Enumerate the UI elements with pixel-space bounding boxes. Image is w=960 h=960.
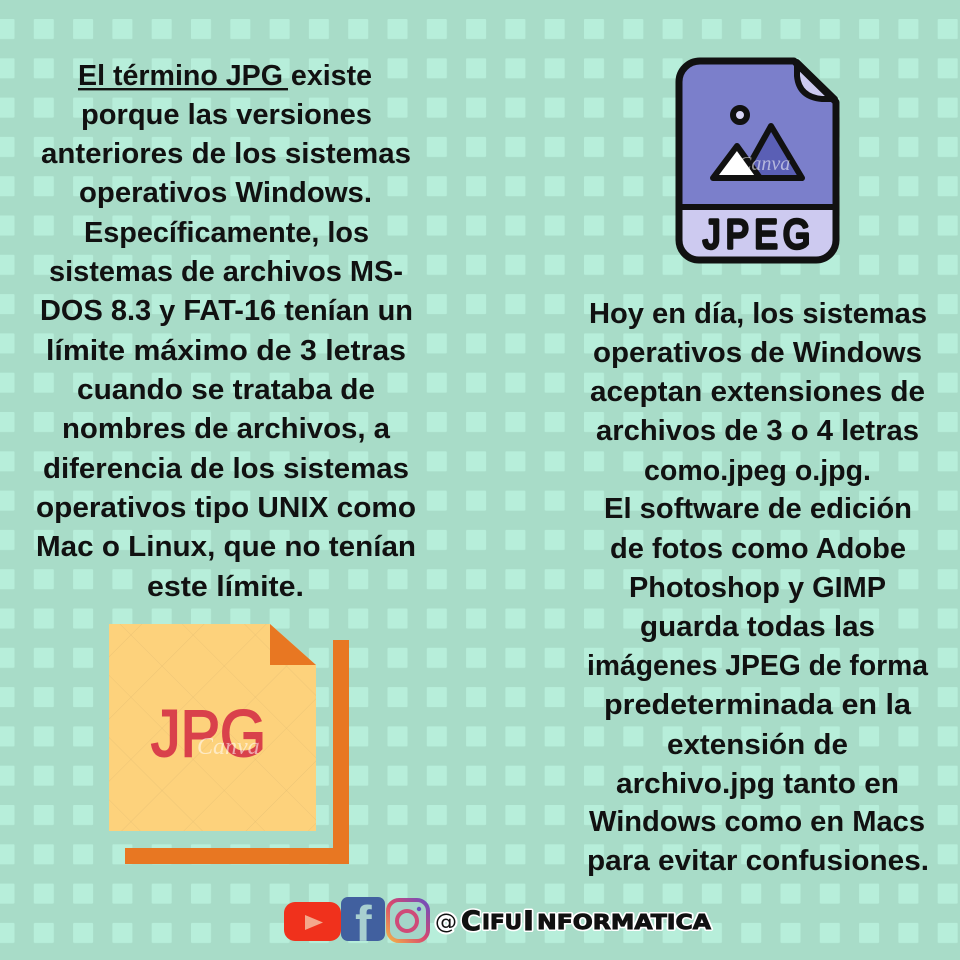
text block: left column about the term JPG: Específicamente, los bbox=[84, 217, 369, 249]
text block: left column about the term JPG: límite máximo de 3 letras bbox=[46, 335, 406, 367]
handle lettering: IFU bbox=[482, 910, 522, 934]
text block: right column about modern systems: archivo.jpg tanto en bbox=[616, 768, 899, 800]
text block: right column about modern systems: como.jpeg o.jpg. bbox=[644, 455, 871, 487]
text block: right column about modern systems: imágenes JPEG de forma bbox=[587, 650, 929, 682]
handle lettering: I bbox=[523, 906, 534, 937]
text block: left column about the term JPG: cuando se trataba de bbox=[77, 374, 375, 406]
handle outline: NFORMATICA bbox=[537, 910, 712, 934]
text block: left column about the term JPG: diferencia de los sistemas bbox=[43, 453, 409, 485]
text block: right column about modern systems: Hoy en día, los sistemas bbox=[589, 298, 927, 330]
handle lettering bbox=[435, 906, 712, 937]
handle outline bbox=[435, 906, 712, 937]
text block: left column about the term JPG: Mac o Linux, que no tenían bbox=[36, 531, 416, 563]
handle text bbox=[435, 906, 712, 937]
text block: left column about the term JPG bbox=[36, 60, 416, 603]
handle outline: IFU bbox=[482, 910, 522, 934]
text block: left column about the term JPG: este límite. bbox=[147, 571, 304, 603]
handle outline: I bbox=[523, 906, 534, 937]
icon: JPG file: JPG bbox=[151, 696, 266, 770]
icon: JPEG file bbox=[678, 61, 837, 260]
icon: Facebook bbox=[341, 896, 385, 952]
icon: YouTube bbox=[284, 902, 341, 941]
text block: right column about modern systems: operativos de Windows bbox=[593, 337, 922, 369]
handle outline: C bbox=[461, 906, 481, 937]
icon: JPEG file: JPEG bbox=[703, 212, 810, 258]
footer: social media handle bbox=[284, 896, 712, 952]
text block: left column about the term JPG: operativos Windows. bbox=[79, 177, 372, 209]
text block: left column about the term JPG: operativos tipo UNIX como bbox=[36, 492, 416, 524]
text block: right column about modern systems: predeterminada en la bbox=[604, 689, 912, 721]
text block: right column about modern systems: aceptan extensiones de bbox=[590, 376, 925, 408]
icon: JPEG file: Canva bbox=[738, 153, 790, 175]
text block: right column about modern systems: guarda todas las bbox=[640, 611, 875, 643]
text block: left column about the term JPG: DOS 8.3 y FAT-16 tenían un bbox=[40, 295, 413, 327]
text block: right column about modern systems: El software de edición bbox=[604, 493, 912, 525]
text block: left column about the term JPG: anteriores de los sistemas bbox=[41, 138, 411, 170]
text block: right column about modern systems: Windows como en Macs bbox=[589, 806, 925, 838]
text block: right column about modern systems: archivos de 3 o 4 letras bbox=[596, 415, 919, 447]
text block: right column about modern systems: para evitar confusiones. bbox=[587, 845, 929, 877]
icon: JPG file: Canva bbox=[197, 734, 260, 760]
text block: left column about the term JPG: porque las versiones bbox=[81, 99, 372, 131]
handle lettering: @ bbox=[435, 910, 457, 934]
text block: right column about modern systems: Photoshop y GIMP bbox=[629, 572, 886, 604]
heading: underlined term: El término JPG existe bbox=[78, 60, 372, 92]
handle lettering: C bbox=[461, 906, 481, 937]
text block: left column about the term JPG: nombres de archivos, a bbox=[62, 413, 391, 445]
text block: right column about modern systems: de fotos como Adobe bbox=[610, 533, 906, 565]
text block: right column about modern systems: extensión de bbox=[667, 729, 848, 761]
icon: Facebook: f bbox=[355, 896, 372, 952]
icon: JPG file bbox=[109, 624, 349, 864]
handle lettering: NFORMATICA bbox=[537, 910, 712, 934]
icon: Instagram bbox=[388, 900, 428, 941]
handle outline: @ bbox=[435, 910, 457, 934]
text block: right column about modern systems bbox=[587, 298, 929, 877]
text block: left column about the term JPG: sistemas de archivos MS- bbox=[49, 256, 403, 288]
